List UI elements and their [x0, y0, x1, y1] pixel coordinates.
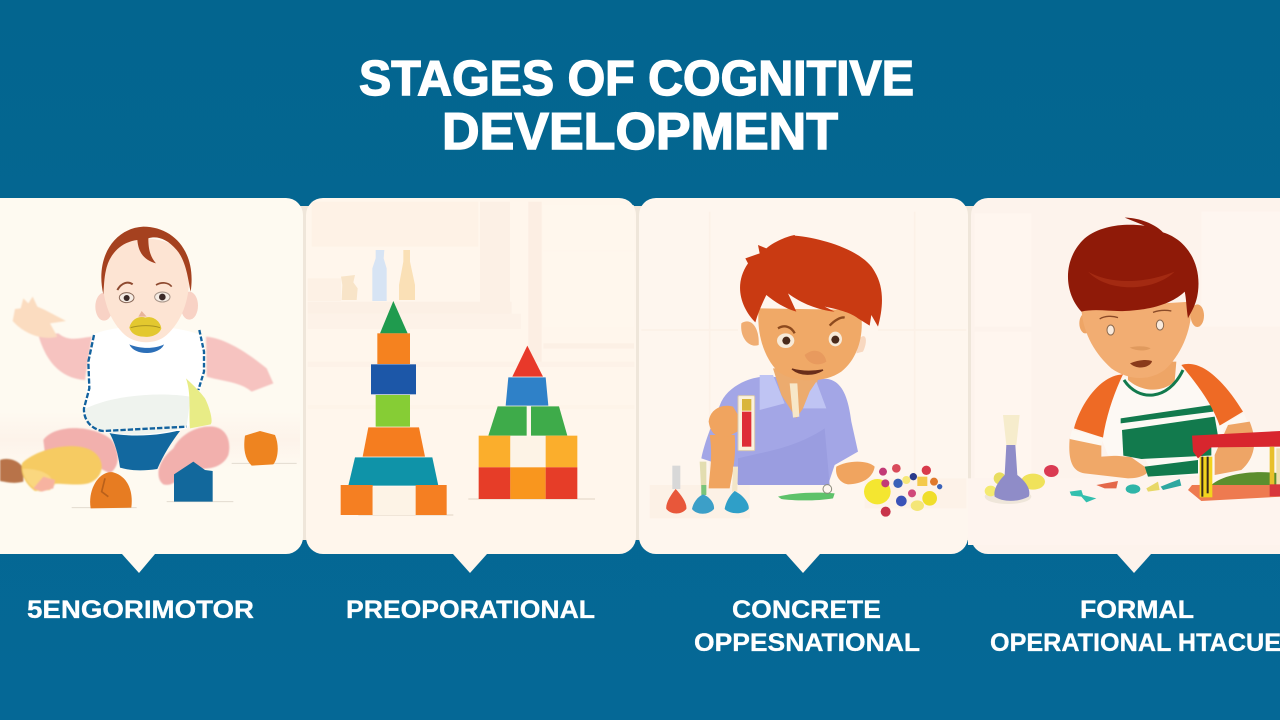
- orange toy front: [72, 472, 137, 508]
- face: [117, 283, 172, 317]
- head: [758, 308, 862, 380]
- right tower: [468, 346, 595, 499]
- right arm: [206, 337, 273, 392]
- label: preoperational: PREOPORATIONAL: [346, 596, 595, 624]
- table pieces: [1070, 479, 1181, 502]
- table: [650, 478, 966, 518]
- window background: [968, 212, 1280, 545]
- flask: [985, 415, 1059, 504]
- face: [1100, 310, 1171, 367]
- shirt: [701, 377, 858, 485]
- orange sleeves: [1070, 364, 1247, 446]
- collar: [1124, 370, 1183, 395]
- label: formal operational: OPERATIONAL HTACUE: [990, 629, 1280, 657]
- window background: [641, 212, 966, 482]
- rubber duck toy: [0, 446, 102, 492]
- older boy with model: [968, 212, 1280, 545]
- arms: [1069, 438, 1148, 478]
- flasks: [666, 462, 749, 514]
- ears: [741, 321, 866, 353]
- face: [777, 317, 845, 374]
- shirt: [1101, 372, 1225, 477]
- red model toy: [1188, 422, 1280, 501]
- head: [1081, 302, 1191, 378]
- yellow bib tag: [186, 378, 212, 428]
- ears and head: [95, 239, 198, 342]
- boy with test tube: [641, 212, 966, 518]
- panel: preoperational: [306, 198, 636, 573]
- bib: [84, 326, 206, 435]
- ears: [1079, 304, 1204, 333]
- shelf items: [341, 250, 415, 301]
- green stripes: [1121, 405, 1221, 477]
- right hand: [836, 462, 875, 484]
- title: DEVELOPMENT: [442, 103, 838, 161]
- colored beads: [864, 464, 942, 517]
- neck and collar: [760, 368, 826, 418]
- green beads: [778, 485, 835, 500]
- hair: [101, 227, 192, 294]
- left tower: [341, 301, 453, 515]
- neck: [1128, 362, 1176, 390]
- title: STAGES OF COGNITIVE: [359, 52, 914, 106]
- diaper: [108, 431, 180, 470]
- label: concrete operational: [694, 596, 920, 657]
- background room: [308, 202, 634, 409]
- left arm: [13, 297, 92, 380]
- label: formal operational: [990, 596, 1280, 657]
- arm and hand with tube: [709, 396, 755, 488]
- label: sensorimotor: 5ENGORIMOTOR: [27, 596, 254, 624]
- title: [359, 52, 914, 161]
- baby illustration: [0, 227, 300, 508]
- label: formal operational: FORMAL: [1080, 596, 1194, 624]
- panel: sensorimotor: [0, 198, 303, 573]
- pacifier: [129, 317, 161, 337]
- hair: [1068, 218, 1199, 318]
- label: concrete operational: CONCRETE: [732, 596, 881, 624]
- orange block right: [232, 431, 297, 466]
- label: concrete operational: OPPESNATIONAL: [694, 629, 920, 657]
- blue house block: [167, 462, 233, 502]
- panel: concrete operational: [639, 198, 968, 573]
- panel: formal operational: [968, 198, 1280, 573]
- blocks scene: [308, 202, 634, 515]
- legs: [43, 426, 229, 485]
- hair: [740, 235, 882, 327]
